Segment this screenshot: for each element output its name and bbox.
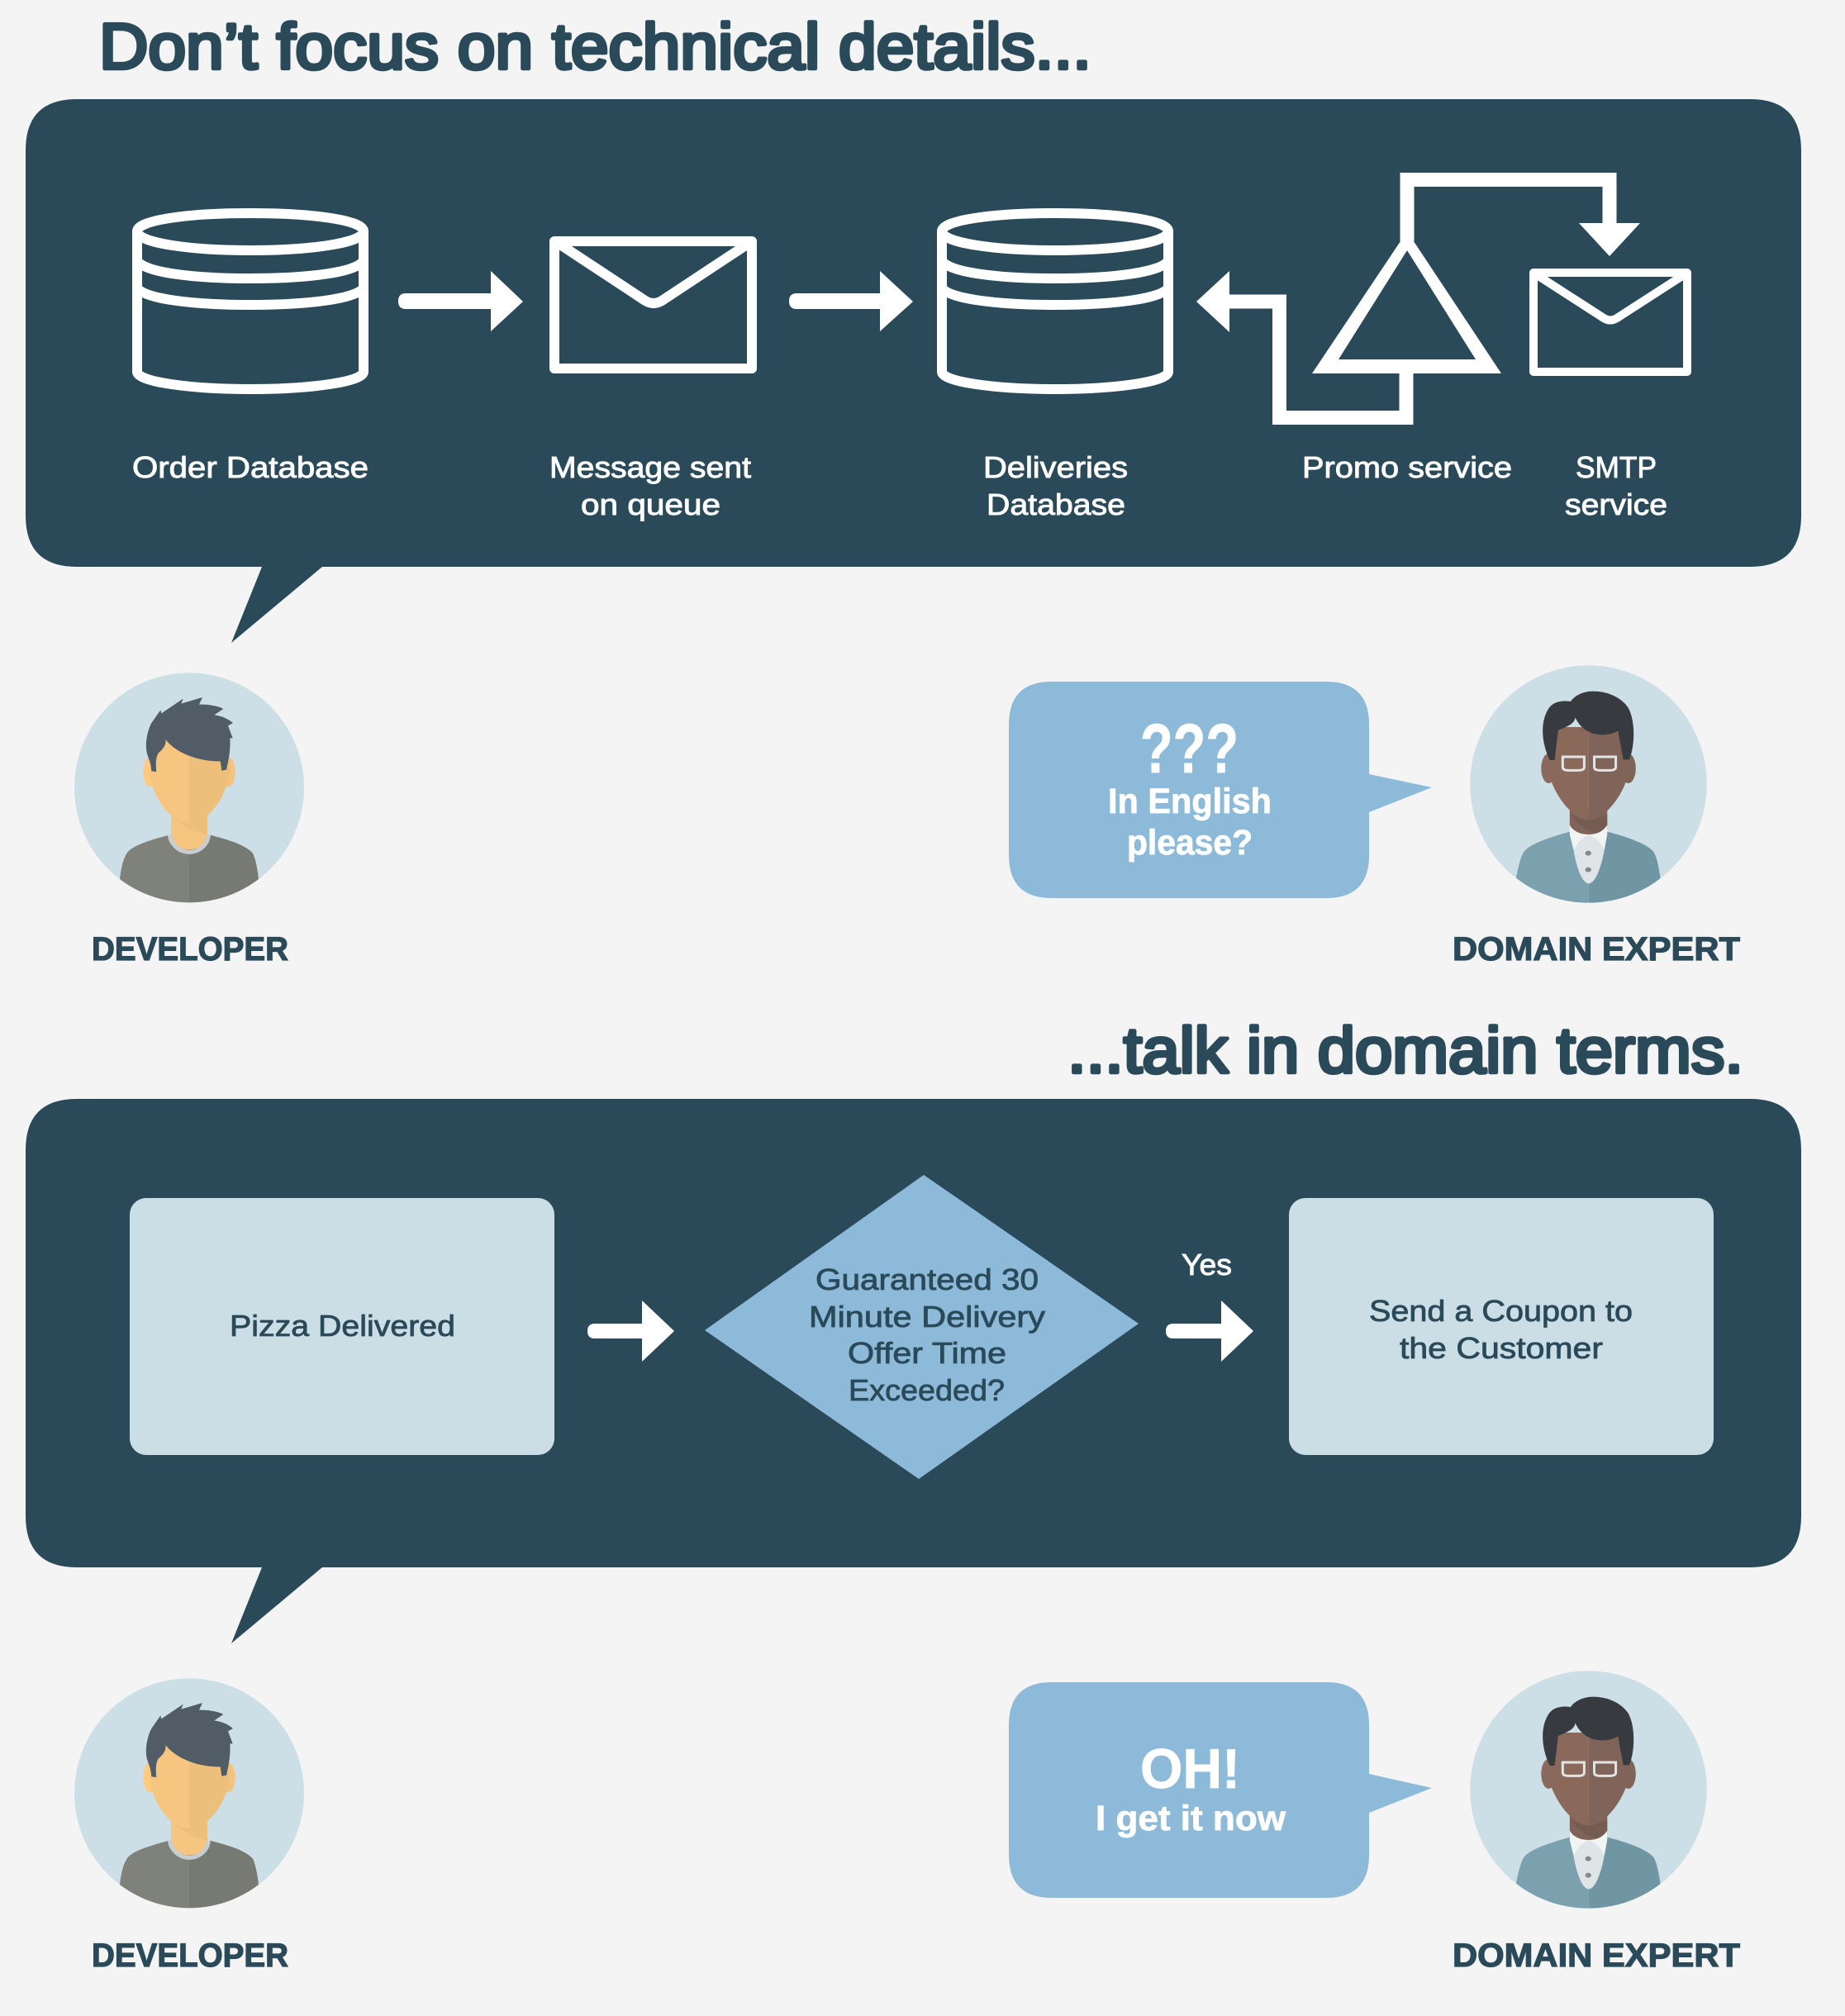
text: question marks: ??? (1140, 710, 1239, 787)
flow box: pizza delivered (130, 1198, 554, 1455)
flow box: send a coupon: the Customer (1400, 1331, 1603, 1365)
bubble shape (1009, 682, 1432, 898)
label: smtp service: SMTP (1576, 450, 1657, 484)
callout: in english please (1009, 682, 1432, 898)
label: message sent on queue: Message sent (549, 450, 751, 484)
developer avatar: top (74, 673, 304, 903)
decision diamond: Guaranteed 30 (816, 1262, 1039, 1296)
arrow: yes branch (1166, 1300, 1253, 1362)
panel background with tail (26, 99, 1801, 643)
arrow: queue to deliveries database (789, 271, 913, 331)
panel background with tail (26, 1099, 1801, 1643)
icon: message envelope (554, 241, 752, 368)
arrow: promo service to deliveries database (1196, 271, 1406, 418)
text: oh: OH! (1140, 1738, 1240, 1800)
label: promo service: Promo service (1302, 450, 1512, 484)
text: i get it now: I get it now (1096, 1799, 1286, 1838)
icon: order database (137, 213, 364, 389)
label: developer: DEVELOPER (92, 931, 288, 968)
icon: deliveries database (942, 213, 1168, 389)
label: message sent on queue: on queue (581, 487, 720, 521)
label: smtp service (1565, 450, 1667, 521)
panel: technical details speech bubble (26, 99, 1801, 643)
developer avatar: bottom (74, 1678, 304, 1909)
icon: promo service triangle (1312, 231, 1501, 373)
label: message sent on queue (549, 450, 751, 521)
icon: smtp envelope (1534, 273, 1687, 372)
label: yes: Yes (1182, 1248, 1232, 1281)
decision diamond (705, 1175, 1139, 1479)
label: deliveries database (983, 450, 1128, 521)
label: deliveries database: Deliveries (983, 450, 1128, 484)
label: domain expert: DOMAIN EXPERT (1453, 931, 1740, 968)
label: developer bottom: DEVELOPER (92, 1938, 288, 1974)
text: in english please (1108, 782, 1272, 863)
arrow: promo service to smtp service (1407, 180, 1640, 256)
label: domain expert bottom: DOMAIN EXPERT (1453, 1938, 1740, 1974)
label: smtp service: service (1565, 487, 1667, 521)
decision diamond: Minute Delivery (809, 1300, 1045, 1334)
callout: oh i get it now (1009, 1682, 1432, 1898)
flow box: send a coupon: Send a Coupon to (1369, 1294, 1633, 1328)
domain expert avatar: top (1470, 665, 1707, 903)
arrow: to decision (587, 1300, 674, 1362)
bubble shape (1009, 1682, 1432, 1898)
panel: domain terms speech bubble (26, 1099, 1801, 1643)
label: deliveries database: Database (987, 487, 1125, 521)
title: don't focus on technical details: Don’t focus on technical details... (99, 10, 1091, 83)
text: in english please: In English (1108, 782, 1272, 821)
text: in english please: please? (1127, 823, 1253, 863)
label: order database: Order Database (132, 450, 369, 484)
domain expert avatar: bottom (1470, 1671, 1707, 1909)
title: talk in domain terms: ...talk in domain terms. (1068, 1014, 1743, 1086)
arrow: database to queue (398, 271, 523, 331)
flow box: send a coupon (1289, 1198, 1714, 1455)
decision diamond: Offer Time (848, 1336, 1006, 1370)
decision diamond: Exceeded? (849, 1373, 1005, 1407)
flow box: pizza delivered: Pizza Delivered (230, 1309, 455, 1343)
